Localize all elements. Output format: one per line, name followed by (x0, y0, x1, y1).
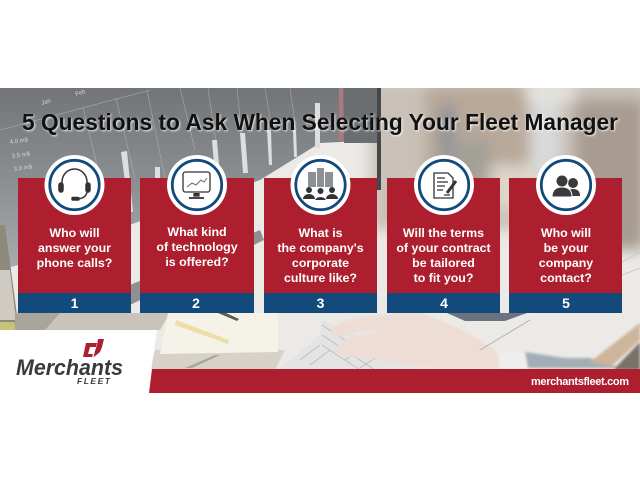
card 2 number: 2 (192, 295, 200, 311)
card 5 question: company (539, 256, 593, 270)
card 3 (264, 155, 377, 313)
card 4 question: be tailored (412, 256, 475, 270)
dark object under cards (447, 313, 527, 321)
monitor screen (0, 88, 344, 267)
card 2 question: of technology (156, 240, 238, 254)
logo panel (0, 330, 157, 410)
title: 5 Questions to Ask When Selecting Your Fleet Manager (23, 110, 619, 136)
logo sub-wordmark: FLEET (77, 376, 111, 386)
card 3 question: What is (298, 226, 343, 240)
icon: headset (59, 169, 90, 200)
card 1 question: Who will (49, 226, 100, 240)
hand (331, 313, 640, 370)
card 1 question: phone calls? (37, 256, 112, 270)
logo mark (83, 339, 104, 357)
footer red band (149, 369, 640, 393)
keyboard (278, 320, 420, 370)
monitor axis labels: 4.0 m$ (9, 137, 29, 146)
card 3 question: corporate (292, 256, 349, 270)
blurred shelf background (370, 80, 640, 250)
card 1 number: 1 (71, 295, 79, 311)
card 4 question: Will the terms (403, 226, 484, 240)
chart grid lines (0, 88, 296, 178)
card 3 number: 3 (317, 295, 325, 311)
title: 5 Questions to Ask When Selecting Your Fleet Manager (22, 109, 618, 135)
footer url: merchantsfleet.com (531, 376, 629, 388)
icon: monitor with chart (183, 172, 210, 198)
infographic canvas (0, 88, 640, 393)
monitor axis labels: 3.5 m$ (11, 151, 31, 160)
monitor axis labels: Feb (75, 89, 87, 98)
monitor axis labels (9, 89, 87, 173)
card 4 question: of your contract (396, 241, 491, 255)
icon: building and people (303, 168, 338, 200)
card 5 question: be your (544, 241, 589, 255)
card 1 (18, 155, 131, 313)
icon: contract and pen (434, 173, 456, 198)
chart bars on monitor (121, 103, 320, 212)
background photo: office desk (0, 80, 640, 370)
monitor axis labels: Jan (41, 98, 52, 107)
card 5 number: 5 (562, 295, 570, 311)
card 5 (509, 155, 622, 313)
card 1 question: answer your (38, 241, 111, 255)
card 3 question: culture like? (284, 271, 357, 285)
card 2 question: is offered? (165, 255, 229, 269)
card 3 question: the company's (277, 241, 364, 255)
card 4 question: to fit you? (414, 271, 473, 285)
icon: two people (552, 175, 580, 197)
logo wordmark: Merchants (16, 355, 123, 380)
monitor axis labels: 3.0 m$ (13, 164, 33, 173)
card 4 (387, 155, 500, 313)
card 2 question: What kind (167, 225, 227, 239)
logo: Merchants Fleet (16, 339, 123, 386)
desk lower elements (130, 230, 264, 305)
card 5 question: Who will (541, 226, 591, 240)
card 5 question: contact? (540, 271, 592, 285)
card 2 (140, 155, 254, 313)
notepad (160, 313, 278, 354)
card 4 number: 4 (440, 295, 448, 311)
